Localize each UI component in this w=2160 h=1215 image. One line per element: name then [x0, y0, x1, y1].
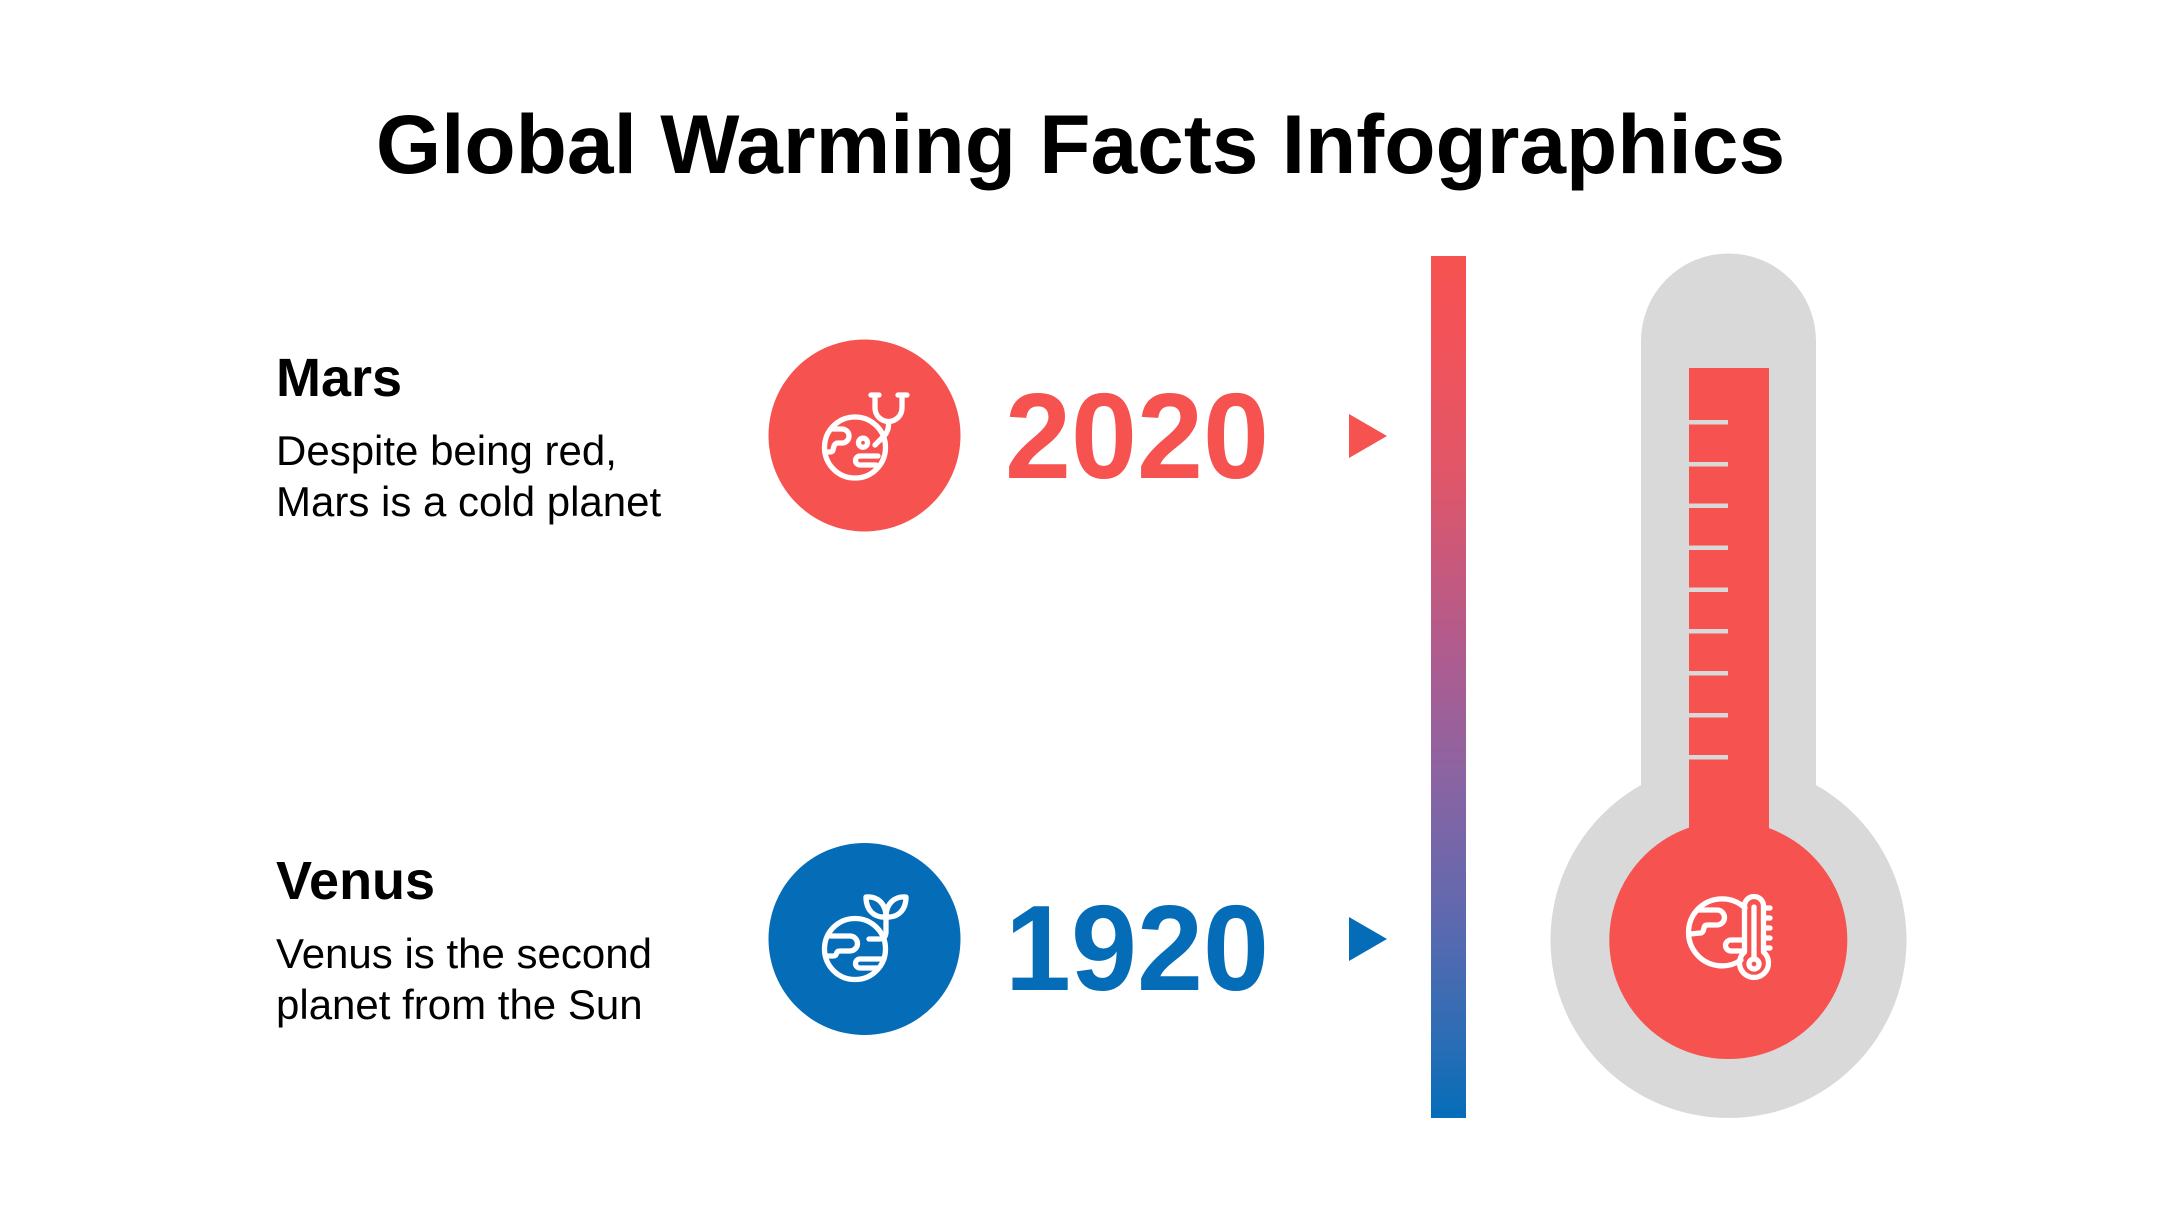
scale ticks — [1689, 420, 1728, 760]
mercury column and bulb — [1609, 368, 1847, 1059]
title: Global Warming Facts Infographics — [376, 97, 1785, 191]
gradient timeline bar — [1431, 256, 1466, 1118]
panel: Mars — [276, 340, 1387, 532]
icon: planet with sprout — [768, 843, 960, 1035]
arrow: 2020 pointer — [1349, 414, 1387, 458]
arrow: 1920 pointer — [1349, 917, 1387, 961]
panel: Venus — [276, 843, 1387, 1035]
heading: Mars: Mars — [276, 348, 402, 408]
icon: planet with thermometer — [1689, 896, 1770, 977]
heading: Venus: Venus — [276, 851, 435, 911]
text block: Mars description: Mars is a cold planet — [276, 478, 662, 525]
year: 1920: 1920 — [1005, 880, 1269, 1016]
text block: Mars description: Despite being red, — [276, 427, 617, 474]
year: 2020: 2020 — [1005, 368, 1269, 504]
text block: Venus description: planet from the Sun — [276, 981, 643, 1028]
icon: planet with stethoscope — [768, 340, 960, 532]
thermometer — [1550, 254, 1907, 1118]
thermometer casing — [1550, 254, 1907, 1118]
text block: Venus description: Venus is the second — [276, 930, 652, 977]
